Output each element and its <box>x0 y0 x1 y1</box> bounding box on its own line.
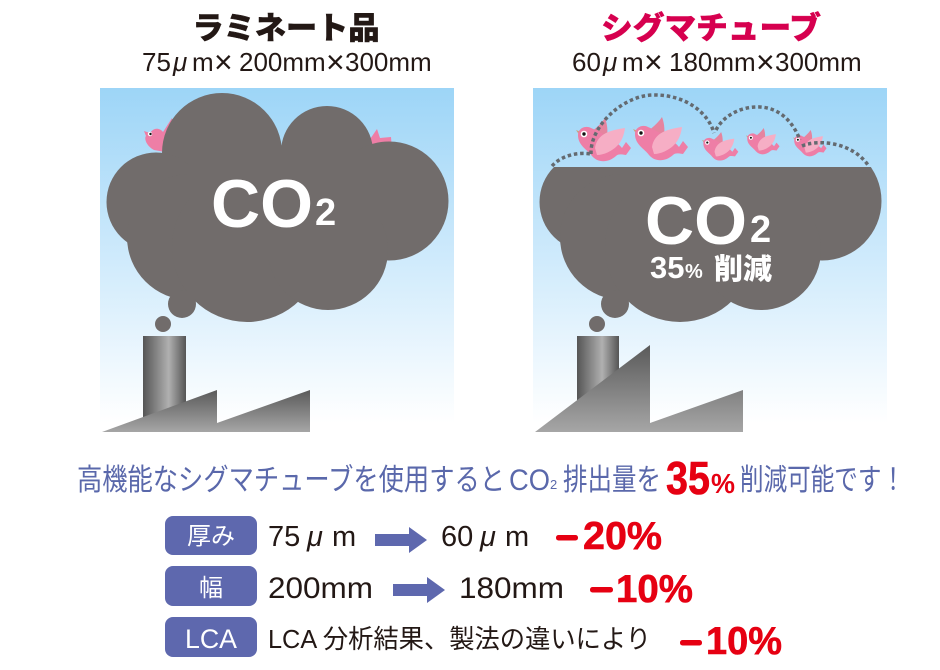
headline: 35 <box>666 452 710 504</box>
value before: m <box>332 521 356 553</box>
icon: hidden bird right <box>366 129 392 150</box>
description: LCA 分析結果、製法の違いにより <box>268 619 651 656</box>
arrow <box>393 577 445 603</box>
subtitle: sigma tube dimensions: × <box>756 44 775 80</box>
headline <box>77 452 905 504</box>
subtitle: sigma tube dimensions: × <box>644 44 663 80</box>
value after: μ <box>479 521 496 553</box>
subtitle: laminate dimensions: 300mm <box>345 47 432 77</box>
factory <box>102 390 310 432</box>
dotted outline of former cloud <box>552 95 868 166</box>
headline: 2 <box>550 477 557 492</box>
chimney <box>577 336 619 406</box>
subtitle: sigma tube dimensions: 180mm <box>669 47 756 77</box>
value before: μ <box>306 521 323 553</box>
value before: 75 <box>268 521 300 553</box>
chimney <box>143 336 186 418</box>
subtitle: sigma tube dimensions: μ <box>602 47 617 77</box>
badge <box>165 617 257 657</box>
factory <box>535 345 743 432</box>
birds <box>576 117 827 161</box>
smoke puff <box>155 316 171 332</box>
value before: 200mm <box>268 572 373 605</box>
badge: 幅 <box>199 568 223 603</box>
subtitle: sigma tube dimensions: 300mm <box>775 47 862 77</box>
row: LCA <box>165 617 782 663</box>
value after: 180mm <box>459 572 564 605</box>
subtitle: sigma tube dimensions: 60 <box>572 47 601 77</box>
label: 35% reduction: 35 <box>650 250 684 285</box>
headline: 高機能なシグマチューブを使用すると <box>77 455 505 499</box>
label: CO2: 2 <box>750 209 771 251</box>
smoke puff <box>589 316 605 332</box>
label: 35% reduction: 削減 <box>714 246 772 288</box>
label: 35% reduction: % <box>685 261 703 283</box>
arrow <box>375 527 427 553</box>
badge <box>165 516 257 555</box>
title: sigma tube: シグマチューブ <box>601 3 821 48</box>
cloud <box>106 93 448 322</box>
subtitle: laminate dimensions: × <box>214 44 233 80</box>
badge <box>165 566 257 606</box>
subtitle: laminate dimensions: 75 <box>142 47 171 77</box>
headline: % <box>711 468 735 499</box>
title: laminate product: ラミネート品 <box>192 3 380 48</box>
subtitle: laminate dimensions: 200mm <box>239 47 326 77</box>
row: width <box>165 566 693 611</box>
change: 10% <box>616 568 693 611</box>
panel: laminate scene <box>100 88 454 432</box>
headline: 排出量を <box>563 455 661 499</box>
value after: m <box>505 521 529 553</box>
label: 35% reduction <box>650 246 772 288</box>
change: 10% <box>706 620 782 663</box>
subtitle: sigma tube dimensions: m <box>622 47 644 77</box>
headline: CO <box>509 464 550 497</box>
label: CO2: CO <box>211 166 313 242</box>
icon: hidden bird left <box>144 118 176 154</box>
cloud reduced <box>540 167 882 322</box>
subtitle: laminate dimensions: μ <box>172 47 187 77</box>
label: CO2: CO <box>645 183 747 259</box>
panel: sigma tube scene <box>533 88 887 432</box>
badge: 厚み <box>187 516 235 551</box>
badge: LCA <box>185 624 237 654</box>
subtitle: laminate dimensions: × <box>326 44 345 80</box>
value after: 60 <box>441 521 473 553</box>
label: CO2: 2 <box>315 192 336 234</box>
change: 20% <box>583 515 662 558</box>
row: thickness <box>165 515 662 558</box>
subtitle: laminate dimensions: m <box>192 47 214 77</box>
